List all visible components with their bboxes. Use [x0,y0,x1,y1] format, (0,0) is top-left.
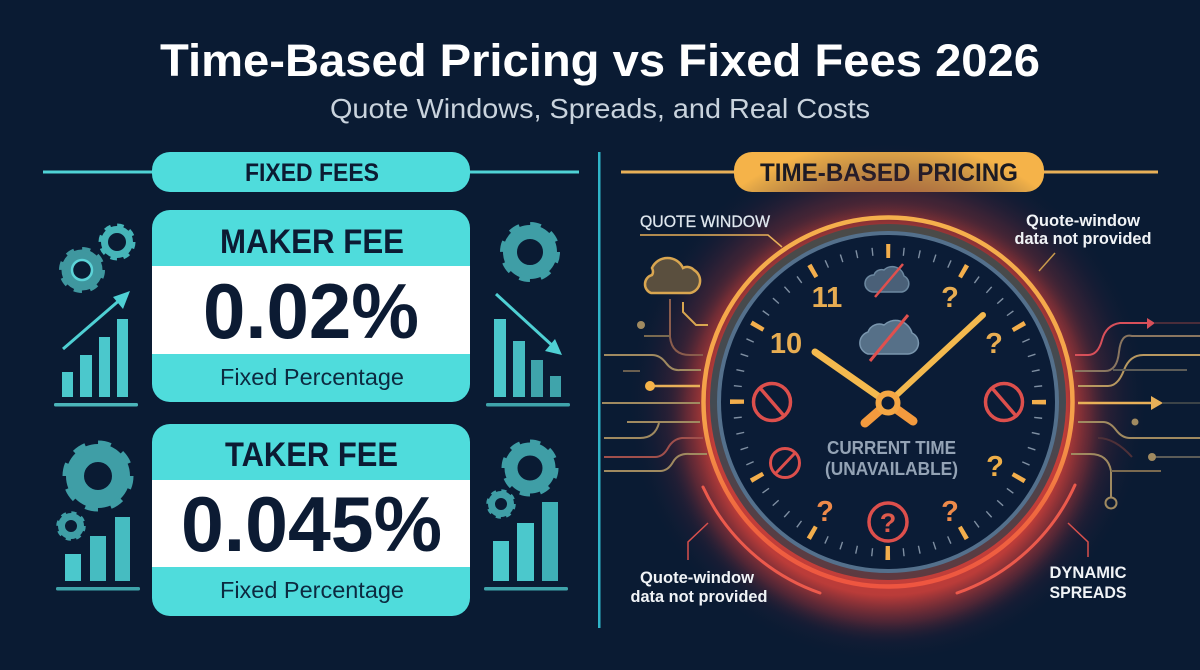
icon: cloud outside clock [645,258,700,293]
panel: fixed fees [43,152,579,616]
callout: quote-window data top right [1014,211,1152,271]
icon: taker right bars with gears [484,442,568,590]
clock glow [626,140,1150,664]
title: Time-Based Pricing vs Fixed Fees 2026 [160,35,1040,86]
taker fee card: TAKER FEE [225,436,398,474]
callout: quote-window data bottom left: Quote-window [640,568,755,587]
major ticks [737,251,1039,553]
clock [704,218,1072,586]
callout: quote-window data bottom left: data not provided [630,587,768,606]
callout: quote window [640,212,782,247]
clock status text: CURRENT TIME [827,438,956,458]
icon: taker left bars with gears [56,444,140,590]
minor ticks [737,251,1039,553]
callout: quote-window data top right: Quote-window [1026,211,1141,230]
callout: quote-window data top right: data not provided [1014,229,1152,248]
maker fee card: Fixed Percentage [220,364,404,390]
hour numeral 10: 10 [770,328,802,360]
time-based pricing header: TIME-BASED PRICING [760,159,1018,187]
clock status text: (UNAVAILABLE) [825,459,958,479]
callout: quote-window data bottom left [630,523,768,606]
left circuit lines [602,299,708,471]
panel: time-based pricing [602,140,1200,664]
icon: small crossed cloud [865,264,909,297]
icon: prohibition sign lower left [770,448,800,478]
icon: large crossed cloud [860,315,918,361]
callout: quote window: QUOTE WINDOW [640,212,770,231]
taker fee card [152,424,470,616]
icon: maker rising bars with gears [54,226,138,406]
time-based pricing header [621,152,1158,192]
maker fee card: 0.02% [203,267,419,355]
icon: prohibition sign left [754,384,790,420]
taker fee card: 0.045% [181,480,442,568]
question mark near 1: ? [941,282,959,314]
clock face [719,233,1057,571]
clock outer ring [710,224,1066,580]
maker fee card [152,210,470,402]
right circuit lines [1071,318,1200,508]
maker fee card: MAKER FEE [220,223,404,261]
fixed fees header: FIXED FEES [245,159,379,187]
icon: circled question mark [869,503,907,541]
hour numeral 11: 11 [812,282,842,314]
question mark near 2: ? [985,328,1003,360]
subtitle: Quote Windows, Spreads, and Real Costs [330,93,870,124]
lower outer arc right [957,485,1075,593]
taker fee card: Fixed Percentage [220,577,404,603]
fixed fees header [43,152,579,192]
lower outer arc left [703,487,820,593]
icon: circled question mark: ? [880,508,896,538]
divider between panels [598,152,600,628]
clock status text [825,438,958,479]
clock hands [815,315,983,423]
callout: dynamic spreads: DYNAMIC [1050,563,1126,582]
question mark near 7: ? [816,496,834,528]
question mark near 4: ? [986,451,1004,483]
question mark near 5: ? [941,496,959,528]
callout: dynamic spreads [1050,523,1126,602]
callout: dynamic spreads: SPREADS [1050,583,1126,602]
icon: maker falling bars with gear [486,225,570,406]
icon: prohibition sign right [986,384,1022,420]
